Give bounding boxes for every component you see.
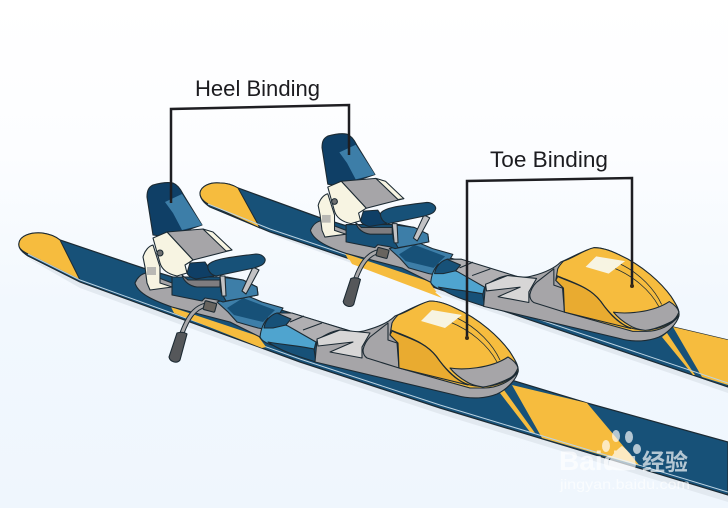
heel base plate bbox=[135, 273, 263, 338]
shell seam bbox=[391, 330, 518, 387]
cream wing bbox=[153, 232, 193, 276]
brake cable bbox=[182, 305, 206, 333]
tail band bbox=[512, 385, 640, 466]
callout end dots bbox=[465, 284, 634, 340]
back binding bbox=[310, 134, 679, 341]
heel struts bbox=[220, 276, 226, 296]
brake clamp bbox=[203, 301, 217, 312]
rear cream cylinder bbox=[143, 245, 172, 290]
toe front gray band bbox=[450, 357, 518, 387]
toe cream label bbox=[421, 310, 462, 328]
watermark bbox=[559, 430, 690, 492]
ski tip bbox=[19, 233, 80, 280]
heel gray seat bbox=[167, 229, 232, 260]
heel armrest pad bbox=[208, 254, 265, 276]
watermark chinese: 经验 bbox=[642, 449, 688, 475]
front binding bbox=[135, 183, 518, 398]
heel blue under-pad bbox=[187, 262, 214, 279]
heel backrest bbox=[147, 183, 202, 237]
watermark paw bbox=[602, 430, 641, 470]
toe yellow shell bbox=[390, 301, 518, 388]
heel binding callout lines bbox=[171, 105, 349, 203]
back ski bbox=[200, 183, 728, 393]
cuff: dark upper bbox=[264, 313, 291, 328]
shell top seams bbox=[450, 318, 500, 362]
toe binding callout lines bbox=[467, 178, 632, 338]
mid section navy bbox=[227, 298, 275, 322]
heel band bbox=[182, 275, 220, 287]
brake handle bbox=[169, 332, 187, 362]
mid section frame bbox=[217, 294, 283, 330]
label: Heel Binding: Heel Binding bbox=[195, 76, 320, 101]
yellow stripe under the binding bbox=[171, 307, 266, 348]
front ski bbox=[19, 233, 728, 502]
cuff: dark lower bbox=[268, 342, 316, 362]
shell side shade bbox=[390, 331, 468, 385]
heel body light bbox=[220, 277, 258, 301]
toe plate bbox=[315, 301, 518, 398]
heel body bbox=[172, 277, 258, 302]
watermark url: jingyan.baidu.com bbox=[559, 476, 690, 492]
gray segments bbox=[277, 313, 350, 345]
label: Toe Binding: Toe Binding bbox=[490, 147, 608, 172]
toe rear gray cap bbox=[363, 323, 399, 368]
toe plate light panel bbox=[317, 330, 370, 358]
watermark wordmark: Baidu bbox=[559, 446, 637, 476]
wing bolt bbox=[157, 250, 163, 256]
cuff: light blue bbox=[260, 318, 316, 350]
